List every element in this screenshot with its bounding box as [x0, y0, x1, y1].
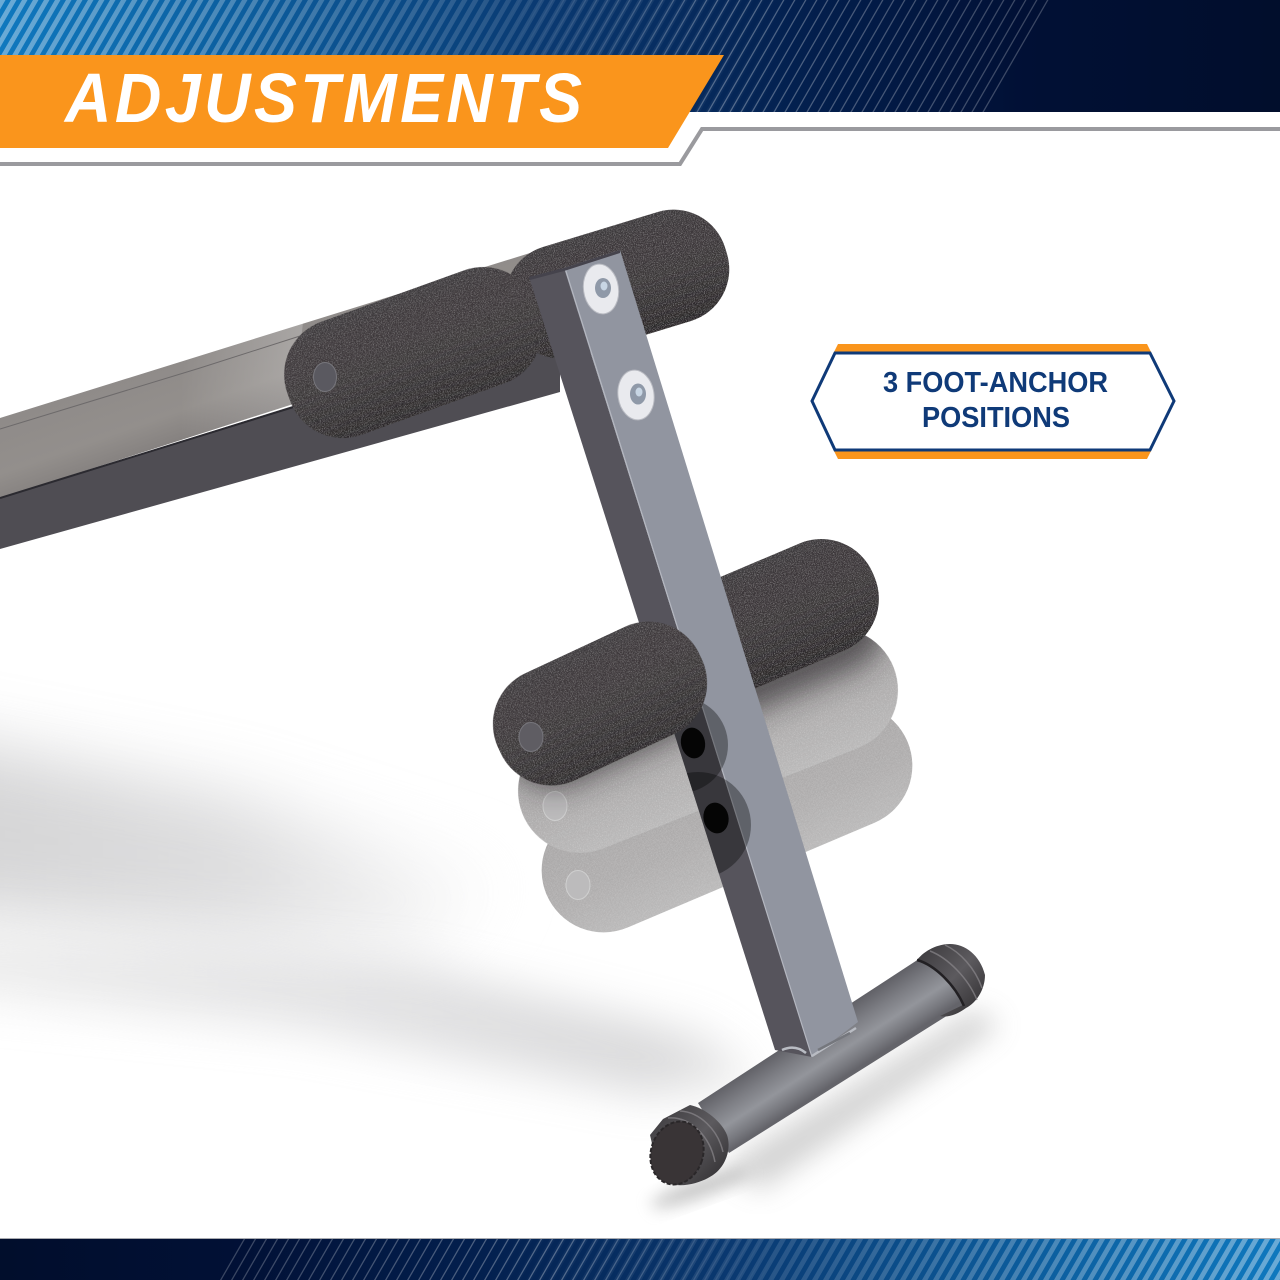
bolt and washer, top — [580, 262, 622, 316]
callout: 3 foot-anchor positions — [812, 344, 1174, 459]
callout text: POSITIONS — [922, 402, 1070, 434]
weld seam — [782, 1028, 856, 1056]
adjustment hole — [701, 800, 731, 836]
callout text: 3 FOOT-ANCHOR — [883, 367, 1108, 399]
foot end cap, left — [642, 1105, 729, 1191]
header grey trim line — [0, 129, 1280, 164]
bench upholstery — [0, 253, 540, 498]
ghost cap overlays on post — [674, 703, 751, 874]
bench side rail — [0, 322, 560, 549]
roller shadows on ghost pads — [518, 636, 892, 808]
title banner — [0, 55, 724, 148]
upper roller pad, front — [268, 251, 558, 454]
post front face — [564, 250, 858, 1057]
vertical post — [529, 250, 858, 1057]
roller end cap — [519, 722, 543, 752]
foot roller, rear, top position — [658, 522, 896, 710]
foot cap face — [642, 1115, 712, 1191]
adjustment hole — [678, 725, 708, 761]
title: ADJUSTMENTS — [63, 60, 582, 138]
floor shadow — [0, 725, 760, 1095]
upper roller pad, rear — [491, 196, 743, 372]
foot end cap, right — [917, 944, 985, 1017]
header band — [0, 0, 1280, 112]
callout orange bars — [834, 344, 1151, 459]
foot bar shadow — [648, 1010, 1000, 1214]
post side face — [529, 268, 812, 1057]
callout hexagon outline — [812, 353, 1174, 450]
bolt and washer, lower — [615, 368, 657, 422]
ghost roller, lowest position — [522, 684, 932, 952]
T-foot tube — [698, 955, 972, 1153]
bench frame and pad — [0, 253, 560, 549]
footer band — [0, 1238, 1280, 1280]
callout text — [883, 367, 1108, 434]
foot roller, front, top position — [474, 603, 726, 804]
ghost roller, middle position — [500, 610, 916, 900]
roller end cap — [314, 362, 336, 392]
